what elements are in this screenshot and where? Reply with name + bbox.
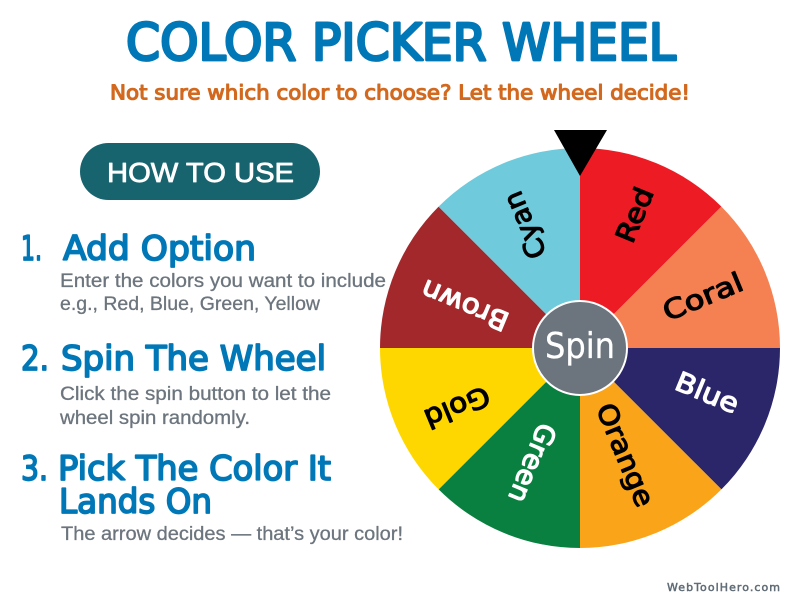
how to use badge: HOW TO USE — [107, 157, 294, 188]
footer credit: WebToolHero.com — [667, 581, 780, 594]
segment: coral: Coral — [658, 267, 748, 328]
segment: orange — [580, 348, 721, 548]
step 3 heading: Lands On — [59, 482, 212, 521]
segment: gold: Gold — [419, 379, 494, 434]
segment: orange: Orange — [589, 399, 660, 511]
step 3 heading: 3. — [21, 449, 48, 488]
segment: brown: Brown — [417, 273, 514, 336]
step 1 description: Enter the colors you want to include — [60, 271, 386, 292]
step 3 description: The arrow decides — that’s your color! — [61, 524, 403, 545]
color wheel — [380, 148, 780, 548]
segment: cyan: Cyan — [498, 187, 553, 263]
step 1 description — [60, 271, 386, 315]
spin button — [533, 301, 627, 395]
step 3 heading: Pick The Color It — [58, 449, 331, 488]
segment: green: Green — [501, 419, 562, 507]
step 1 description: e.g., Red, Blue, Green, Yellow — [60, 294, 320, 315]
segment: red: Red — [610, 183, 661, 247]
segment: coral — [580, 207, 780, 348]
step 2 heading: Spin The Wheel — [61, 339, 326, 378]
segment: cyan — [439, 148, 580, 348]
segment: brown — [380, 207, 580, 348]
step 2 — [21, 339, 331, 429]
step 2 heading: 2. — [21, 339, 49, 378]
title: COLOR PICKER WHEEL — [126, 14, 677, 73]
step 3 heading — [21, 449, 331, 521]
segment: blue — [580, 348, 780, 489]
subtitle: Not sure which color to choose? Let the wheel decide! — [110, 80, 690, 104]
step 1 heading: 1. — [21, 229, 42, 268]
segment: green — [439, 348, 580, 548]
step 2 description — [59, 384, 331, 429]
step 1 heading: Add Option — [63, 229, 256, 268]
how to use badge — [80, 143, 320, 200]
step 3 — [21, 449, 403, 545]
segment: gold — [380, 348, 580, 489]
step 1 — [21, 229, 386, 315]
segment: red — [580, 148, 721, 348]
step 2 description: wheel spin randomly. — [59, 408, 250, 429]
spin button: Spin — [545, 326, 615, 367]
icon: pointer arrow — [554, 130, 607, 176]
segment: blue: Blue — [670, 367, 743, 420]
step 2 description: Click the spin button to let the — [60, 384, 331, 405]
